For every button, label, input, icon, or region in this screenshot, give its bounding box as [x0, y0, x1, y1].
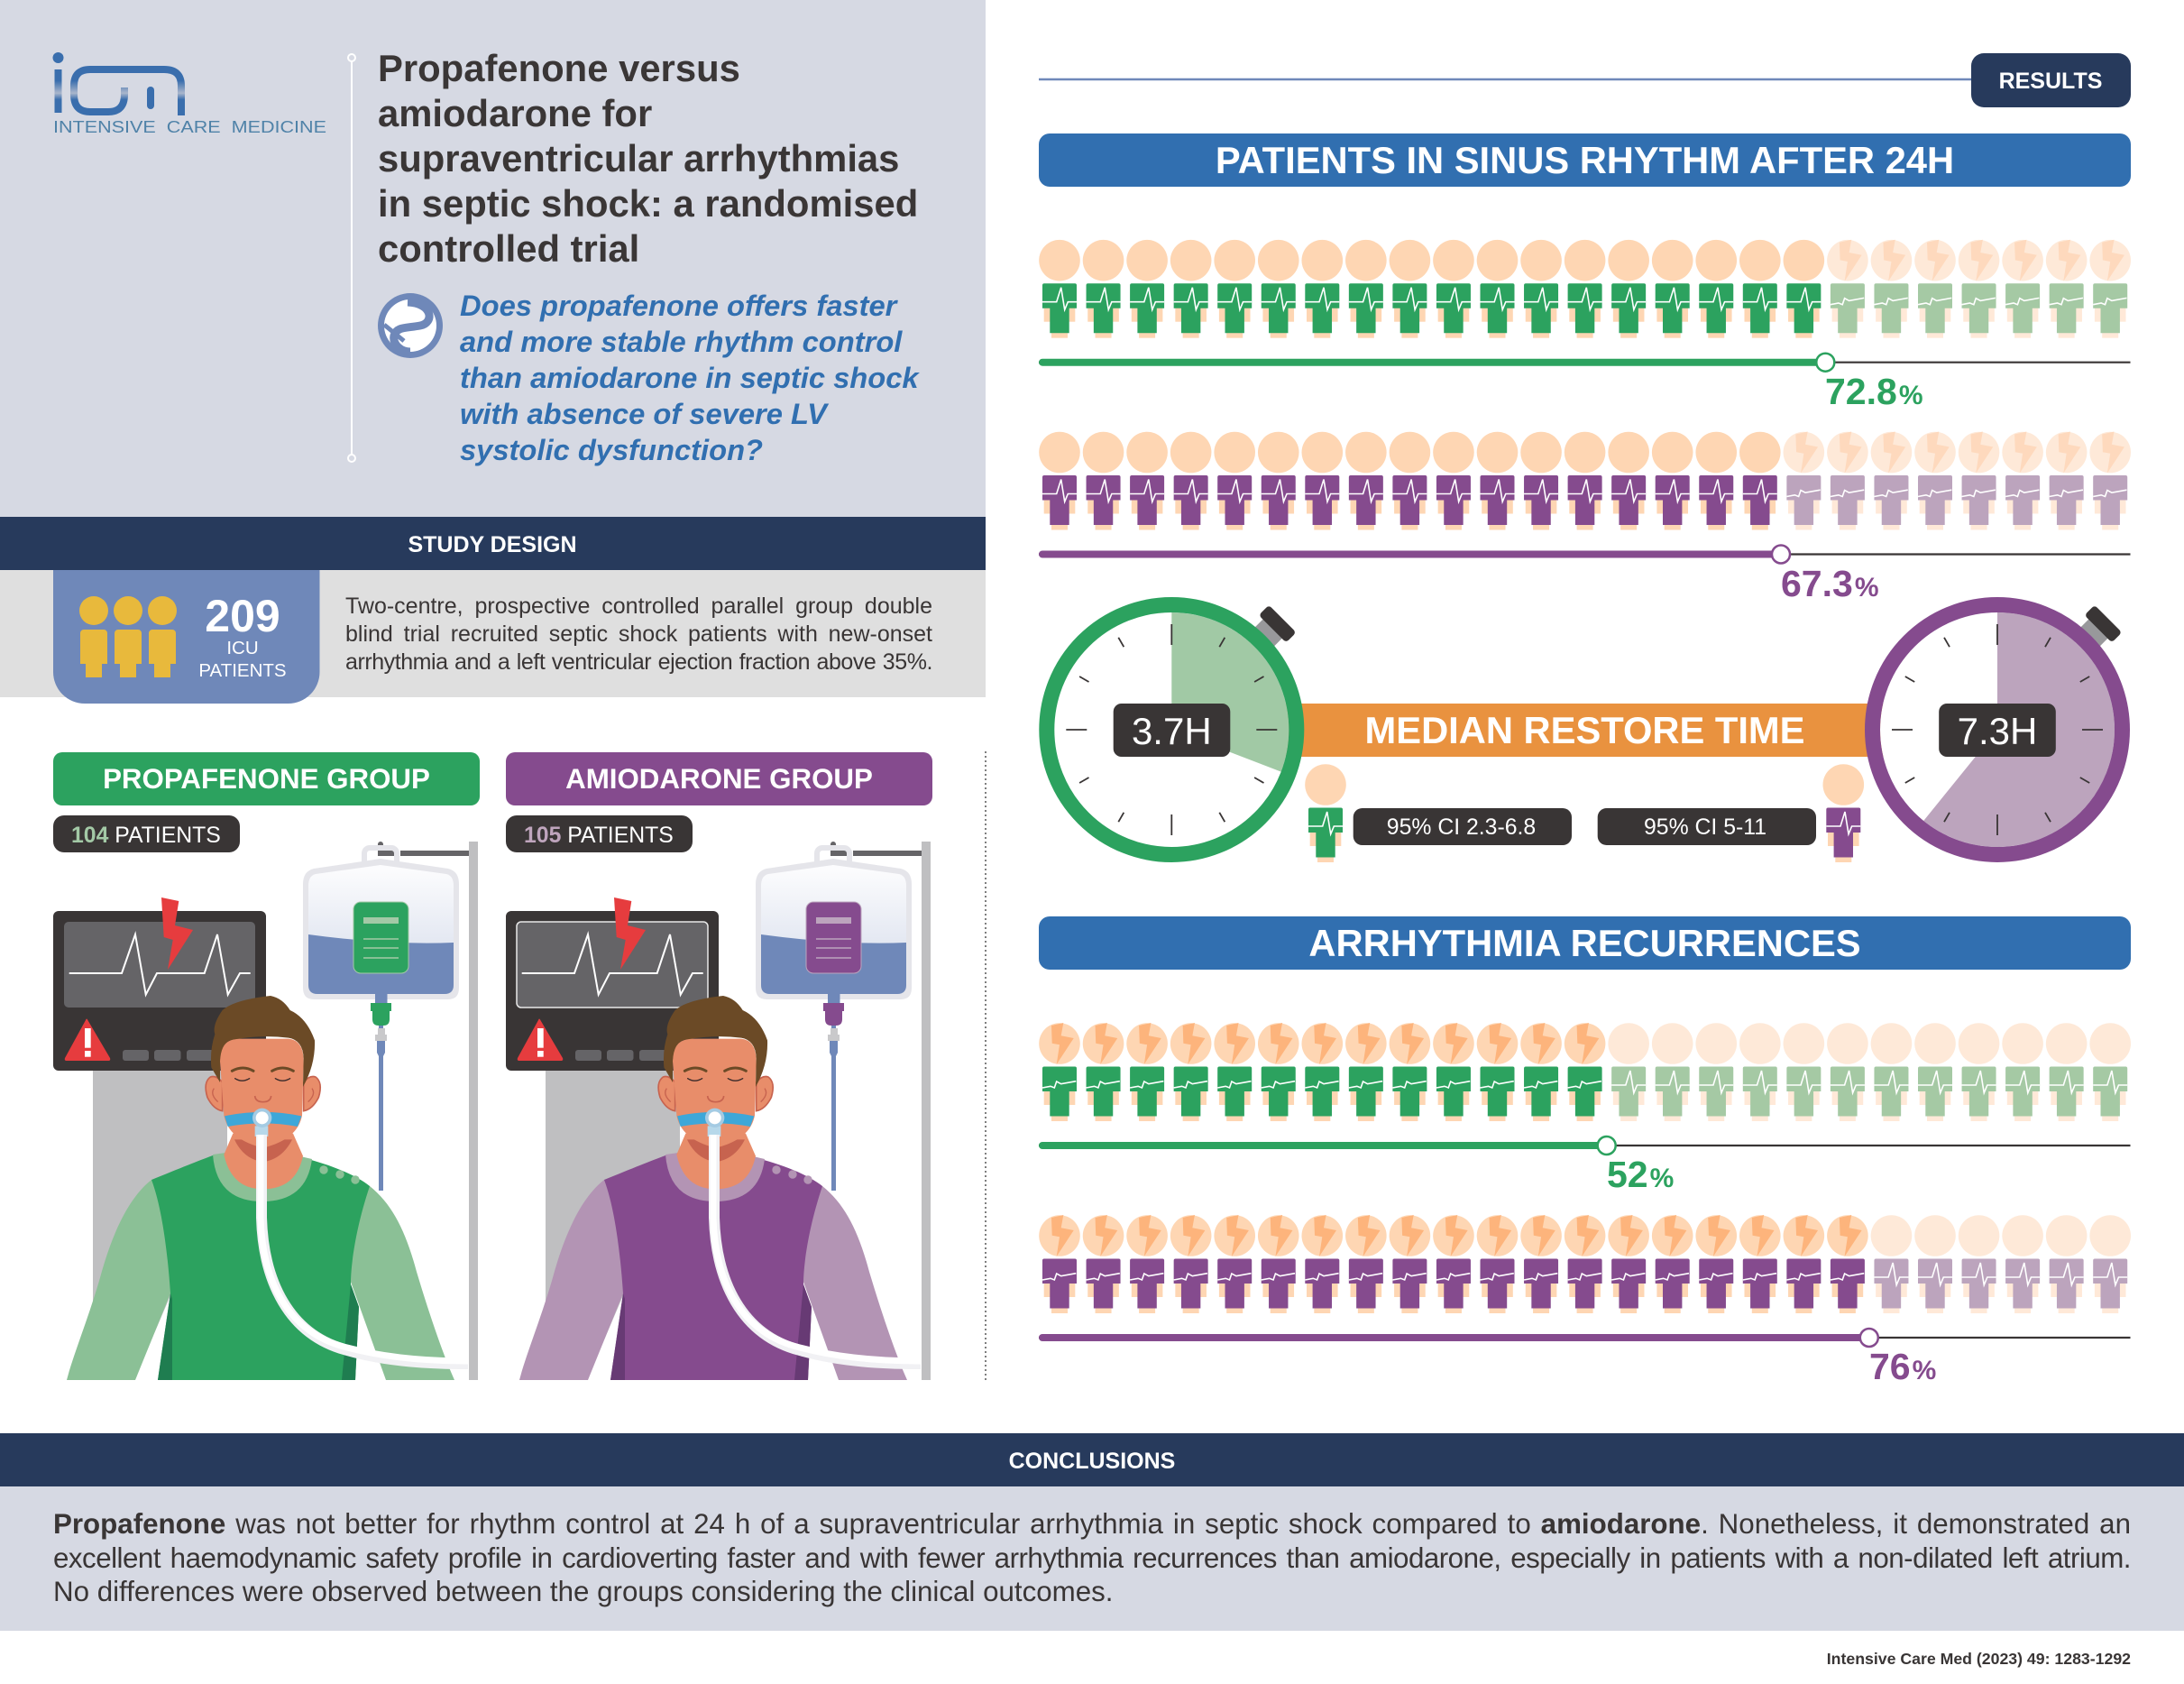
- study design background band: [0, 570, 986, 697]
- results tag with rule: RESULTS: [1999, 69, 2102, 94]
- patient count card: ICU: [226, 638, 259, 658]
- research question: than amiodarone in septic shock: [460, 361, 920, 394]
- person icon: amiodarone: [1823, 764, 1864, 862]
- median restore time banner: MEDIAN RESTORE TIME: [1365, 709, 1804, 751]
- oxygen tube: [713, 1135, 921, 1364]
- progress bar 72.8%: [1039, 354, 2130, 412]
- research question: systolic dysfunction?: [460, 433, 763, 466]
- heading: patients in sinus rhythm: [1039, 133, 2131, 187]
- logo: ICM Intensive Care Medicine: [52, 52, 326, 136]
- conclusions text: Propafenone was not better for rhythm control at 24 h of a supraventricular arrhythmia in septic shock compared to amiodarone. Nonetheless, it demonstrated an: [53, 1508, 2131, 1540]
- IV pole: [830, 842, 931, 1380]
- header panel background: [0, 0, 986, 518]
- monitor stand: [93, 1071, 227, 1380]
- progress bar 67.3%: 67.3%: [1781, 563, 1879, 604]
- confidence interval pill: propafenone: 95% CI 2.3-6.8: [1387, 815, 1536, 840]
- ECG monitor: [53, 897, 266, 1071]
- heading: arrhythmia recurrences: ARRHYTHMIA RECURRENCES: [1308, 922, 1861, 964]
- propafenone patient count pill: 104 PATIENTS: [71, 824, 221, 848]
- title: controlled trial: [378, 227, 639, 270]
- confidence interval pill: propafenone: [1354, 808, 1572, 845]
- study design description: blind trial recruited septic shock patients with new-onset: [345, 621, 932, 647]
- title: Propafenone versus: [378, 47, 740, 89]
- pictogram row: propafenone recurrences 13 of 25: [1039, 1023, 2131, 1121]
- person icon: propafenone: [1305, 764, 1346, 862]
- pictogram row: amiodarone sinus rhythm 17 of 25: [1039, 431, 2131, 530]
- IV pole: [378, 842, 478, 1380]
- conclusions text: No differences were observed between the groups considering the clinical outcomes.: [53, 1576, 1113, 1607]
- conclusions heading: CONCLUSIONS: [1009, 1449, 1175, 1474]
- patient head: [658, 996, 773, 1189]
- IV bag: [303, 848, 459, 1191]
- propafenone group header: [53, 752, 480, 805]
- oxygen tube: [261, 1135, 468, 1364]
- propafenone patient count pill: [53, 815, 240, 852]
- amiodarone group header: AMIODARONE GROUP: [565, 763, 873, 795]
- illustration: amiodarone patient: [506, 842, 931, 1380]
- monitor stand: [546, 1071, 680, 1380]
- pictogram row: amiodarone recurrences 19 of 25: [1039, 1215, 2131, 1313]
- IV bag: [756, 848, 912, 1191]
- patient count card: 209: [205, 591, 280, 641]
- illustration: propafenone patient: [53, 842, 478, 1380]
- study design description: [345, 594, 932, 675]
- study design heading: STUDY DESIGN: [408, 532, 577, 557]
- study design heading: [0, 517, 986, 570]
- amiodarone patient count pill: 105 PATIENTS: [524, 824, 674, 848]
- title: amiodarone for: [378, 92, 652, 134]
- patient count card: [53, 570, 319, 704]
- progress bar 76%: 76%: [1869, 1346, 1936, 1387]
- logo: ICM Intensive Care Medicine: INTENSIVE CARE MEDICINE: [53, 118, 326, 136]
- research question: and more stable rhythm control: [460, 325, 903, 358]
- heading: arrhythmia recurrences: [1039, 916, 2131, 970]
- amiodarone group header: [506, 752, 932, 805]
- patient head: [206, 996, 320, 1189]
- heading: patients in sinus rhythm: PATIENTS IN SINUS RHYTHM AFTER 24H: [1216, 139, 1954, 181]
- confidence interval pill: amiodarone: [1598, 808, 1816, 845]
- icon: question swirl: [378, 293, 443, 358]
- study design description: arrhythmia and a left ventricular ejection fraction above 35%.: [345, 649, 932, 675]
- progress bar 52%: 52%: [1607, 1154, 1674, 1195]
- stopwatch: amiodarone 7.3H: 7.3H: [1958, 710, 2037, 752]
- ECG monitor: [506, 897, 719, 1071]
- progress bar 76%: [1039, 1329, 2130, 1387]
- conclusions text: excellent haemodynamic safety profile in cardioverting faster and with fewer arrhythmia recurrences than amiodarone, especially in patients with a non-dilated left atrium.: [53, 1542, 2131, 1573]
- stopwatch: propafenone 3.7H: [1047, 604, 1297, 855]
- patient torso: [67, 1153, 454, 1380]
- amiodarone patient count pill: [506, 815, 693, 852]
- patient count card: PATIENTS: [198, 660, 287, 681]
- results tag with rule: [1039, 53, 2131, 107]
- progress bar 72.8%: 72.8%: [1825, 371, 1922, 412]
- title: in septic shock: a randomised: [378, 182, 918, 225]
- stopwatch: amiodarone 7.3H: [1872, 604, 2123, 855]
- research question: with absence of severe LV: [460, 397, 830, 430]
- conclusions heading: [0, 1433, 2184, 1486]
- patient torso: [519, 1153, 907, 1380]
- confidence interval pill: amiodarone: 95% CI 5-11: [1644, 815, 1766, 840]
- research question: Does propafenone offers faster: [460, 289, 899, 322]
- propafenone group header: PROPAFENONE GROUP: [103, 763, 430, 795]
- title: supraventricular arrhythmias: [378, 137, 899, 179]
- study design description: Two-centre, prospective controlled parallel group double: [345, 594, 932, 619]
- vertical divider with end nodes: [348, 54, 355, 462]
- median restore time banner: [1280, 704, 1894, 757]
- citation: Intensive Care Med (2023) 49: 1283-1292: [1827, 1650, 2131, 1668]
- stopwatch: propafenone 3.7H: 3.7H: [1132, 710, 1212, 752]
- conclusions panel background: [0, 1486, 2184, 1631]
- conclusions text: [53, 1508, 2131, 1607]
- progress bar 52%: [1039, 1136, 2130, 1195]
- progress bar 67.3%: [1039, 545, 2130, 604]
- pictogram row: propafenone sinus rhythm 18 of 25: [1039, 240, 2131, 338]
- dotted separator: [985, 751, 986, 1382]
